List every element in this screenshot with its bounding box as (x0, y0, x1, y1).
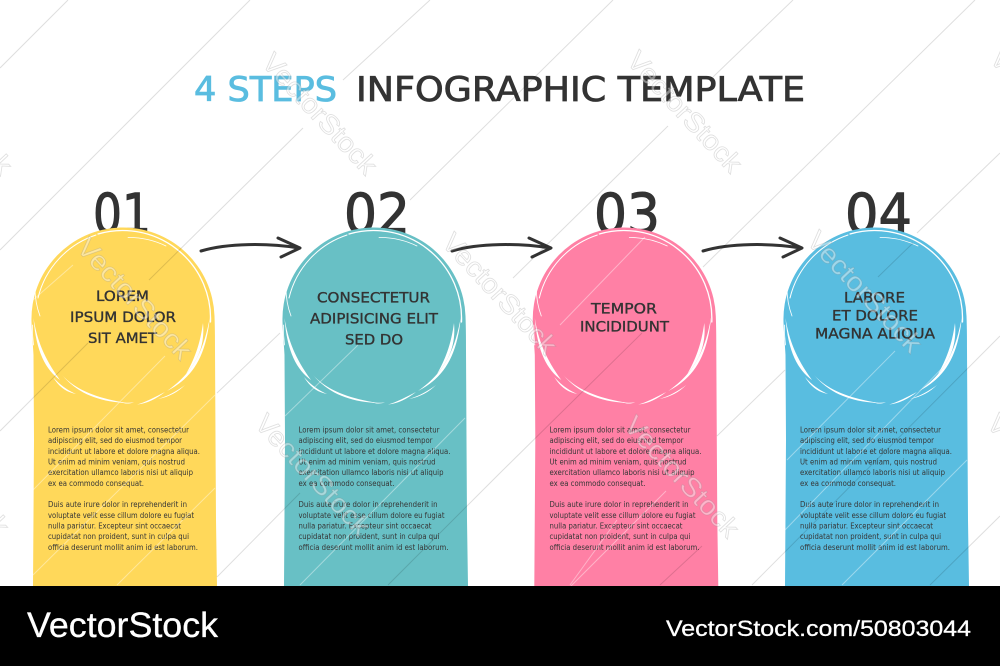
step 4 title: MAGNA ALIQUA (815, 326, 935, 342)
step 1 body text: Duis aute irure dolor in reprehenderit in (48, 500, 187, 509)
step 1 body text: Lorem ipsum dolor sit amet, consectetur (48, 426, 190, 434)
step 1 body text: ex ea commodo consequat. (48, 479, 144, 488)
heading (194, 70, 805, 110)
step number 01: 01 (93, 182, 151, 246)
watermarks: VectorStock (71, 232, 198, 366)
step 4 body text: officia deserunt mollit anim id est laborum. (800, 543, 950, 552)
step 4 body text (800, 426, 952, 552)
step 4 body text: adipiscing elit, sed do eiusmod tempor (800, 436, 935, 445)
step 1 body text: nulla pariatur. Excepteur sint occaecat (48, 522, 181, 530)
step 4 body text: Lorem ipsum dolor sit amet, consectetur (800, 426, 942, 434)
step 4 panel (783, 182, 969, 586)
step 1 title: LOREM (96, 289, 149, 305)
step 1 body text: officia deserunt mollit anim id est laborum. (48, 543, 198, 552)
step 1 body text: adipiscing elit, sed do eiusmod tempor (48, 436, 183, 445)
step 2 body text: Ut enim ad minim veniam, quis nostrud (298, 458, 436, 466)
step 2 body text: incididunt ut labore et dolore magna aliqua. (298, 447, 450, 456)
arrow: step 3 to 4 (703, 238, 802, 257)
step 4 body text: voluptate velit esse cillum dolore eu fugiat (800, 511, 946, 520)
step 2 body text: officia deserunt mollit anim id est laborum. (298, 543, 448, 552)
step 1 body text: voluptate velit esse cillum dolore eu fugiat (48, 511, 194, 520)
step 2 body text: nulla pariatur. Excepteur sint occaecat (298, 522, 432, 530)
step 4 title (815, 290, 935, 342)
step number 02: 02 (344, 182, 410, 246)
watermarks: VectorStock (801, 225, 928, 359)
step 3 body text: voluptate velit esse cillum dolore eu fugiat (550, 511, 696, 520)
step 2 panel (282, 182, 468, 586)
step 3 title (580, 302, 669, 336)
step 3 body text: ex ea commodo consequat. (550, 479, 646, 488)
step number 03: 03 (594, 182, 660, 246)
step 3 body text: incididunt ut labore et dolore magna aliqua. (550, 447, 702, 456)
step 4 title: LABORE (844, 290, 905, 306)
step 3 title: TEMPOR (590, 302, 657, 318)
step 2 body text: voluptate velit esse cillum dolore eu fugiat (298, 511, 445, 520)
step 2 title: SED DO (345, 332, 403, 348)
watermarks: VectorStock (256, 47, 383, 181)
blue column shape (783, 227, 969, 586)
step 4 body text: exercitation ullamco laboris nisi ut aliquip (800, 468, 945, 477)
step 3 body text: exercitation ullamco laboris nisi ut aliquip (550, 468, 695, 477)
pink column shape (533, 227, 718, 586)
step 2 body text: Lorem ipsum dolor sit amet, consectetur (298, 426, 440, 434)
step 3 body text: cupidatat non proident, sunt in culpa qui (550, 532, 690, 541)
step 2 body text: Duis aute irure dolor in reprehenderit in (298, 500, 438, 509)
step 2 title: ADIPISICING ELIT (310, 312, 438, 328)
step 2 body text (298, 426, 450, 552)
footer image id: VectorStock.com/50803044 (666, 616, 971, 641)
step 2 body text: adipiscing elit, sed do eiusmod tempor (298, 436, 433, 445)
watermarks: VectorStock (249, 408, 376, 542)
footer logo: VectorStock (27, 606, 219, 645)
step 3 panel (533, 182, 718, 586)
step 2 title: CONSECTETUR (317, 290, 430, 306)
heading accent: 4 steps: 4 STEPS (194, 70, 337, 110)
step 3 body text: Ut enim ad minim veniam, quis nostrud (550, 458, 687, 466)
hand-drawn circle ring (32, 231, 211, 404)
hand-drawn circle ring (283, 231, 462, 404)
step 1 body text: Ut enim ad minim veniam, quis nostrud (48, 458, 185, 466)
watermarks: VectorStock (618, 410, 745, 544)
step 4 body text: ex ea commodo consequat. (800, 479, 896, 488)
step 2 body text: cupidatat non proident, sunt in culpa qui (298, 532, 440, 541)
watermarks: VectorStock (436, 227, 563, 361)
step 2 body text: ex ea commodo consequat. (298, 479, 394, 488)
step 3 body text: adipiscing elit, sed do eiusmod tempor (550, 436, 684, 445)
step 3 title: INCIDIDUNT (580, 320, 669, 336)
step 4 body text: incididunt ut labore et dolore magna aliqua. (800, 447, 952, 456)
step 3 body text: nulla pariatur. Excepteur sint occaecat (550, 522, 683, 530)
step 1 body text: incididunt ut labore et dolore magna aliqua. (48, 447, 200, 456)
heading main: infographic template: INFOGRAPHIC TEMPLATE (356, 70, 805, 110)
step 1 body text (48, 426, 200, 552)
hand-drawn circle ring (784, 231, 963, 404)
yellow column shape (31, 227, 217, 586)
step 4 body text: nulla pariatur. Excepteur sint occaecat (800, 522, 933, 530)
footer bar (0, 586, 1000, 666)
teal column shape (282, 227, 468, 586)
step 4 body text: Duis aute irure dolor in reprehenderit in (800, 500, 939, 509)
step 2 body text: exercitation ullamco laboris nisi ut aliquip (298, 468, 444, 477)
step 1 body text: exercitation ullamco laboris nisi ut aliquip (48, 468, 193, 477)
step 3 body text: Lorem ipsum dolor sit amet, consectetur (550, 426, 691, 434)
step 2 title (310, 290, 438, 348)
watermarks: VectorStock (621, 45, 748, 179)
step 3 body text: Duis aute irure dolor in reprehenderit in (550, 500, 689, 509)
hand-drawn circle ring (534, 231, 712, 404)
step 1 panel (31, 182, 217, 586)
step 1 title: SIT AMET (88, 331, 157, 347)
arrow: step 2 to 3 (452, 238, 551, 257)
step number 04: 04 (845, 182, 912, 246)
step 1 title: IPSUM DOLOR (70, 310, 176, 326)
step 4 title: ET DOLORE (832, 308, 918, 324)
watermarks (0, 43, 1000, 544)
step 1 title (70, 289, 176, 347)
step 1 body text: cupidatat non proident, sunt in culpa qui (48, 532, 189, 541)
step 3 body text: officia deserunt mollit anim id est laborum. (550, 543, 700, 552)
step 3 body text (550, 426, 702, 552)
arrow: step 1 to 2 (201, 238, 300, 257)
step 4 body text: Ut enim ad minim veniam, quis nostrud (800, 458, 937, 466)
step 4 body text: cupidatat non proident, sunt in culpa qui (800, 532, 941, 541)
